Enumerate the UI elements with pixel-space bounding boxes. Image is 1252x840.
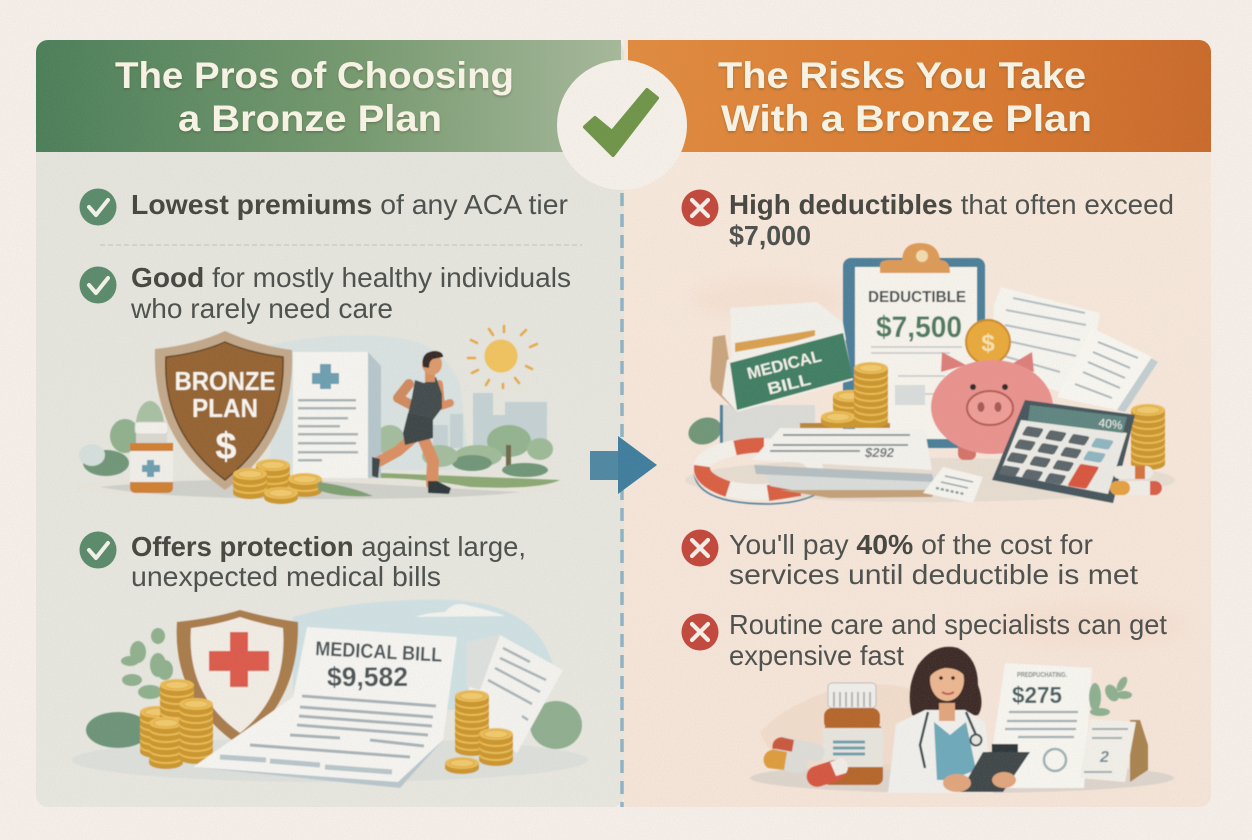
background hill and cloud [293,600,553,710]
doctor [888,647,993,793]
pills [1110,466,1163,495]
document [293,352,381,478]
calculator [992,400,1135,503]
text: You'll pay 40% of the cost for [729,529,1093,560]
text [131,531,526,592]
text: services until deductible is met [729,559,1138,590]
sun [468,326,537,388]
trees and bushes [79,401,553,477]
text [729,189,1174,251]
panel: risks [624,40,1211,807]
coins left [140,679,213,769]
pills [764,735,848,790]
text [130,262,571,324]
back paper [466,635,563,753]
header band: risks [628,40,1211,152]
shield: bronze plan: BRONZE [174,366,276,396]
calculator: 40% [1098,416,1124,432]
ground [72,738,588,782]
bullet: protection [80,531,526,592]
card and plant: 2 [1099,749,1109,766]
medical bill [193,627,457,788]
text: who rarely need care [130,293,393,324]
medicine bottle [823,683,883,785]
header band: pros [36,40,621,152]
clipboard: DEDUCTIBLE [868,289,966,306]
text: Offers protection against large, [131,531,526,562]
medical bill: $9,582 [327,662,408,692]
heading: risks: The Risks You Take [718,55,1086,96]
text: unexpected medical bills [131,561,441,592]
leaf [685,413,725,449]
heading: pros [115,55,514,139]
icon: check [80,532,116,568]
text: Good for mostly healthy individuals [131,262,571,293]
shield: red cross [177,610,298,746]
ground [75,473,565,499]
bill: 275: PREDPUCHATING. [1017,670,1067,679]
panel: pros [36,40,624,807]
icon: x [682,190,718,226]
bullet: lowest premiums [80,188,568,226]
piggy bank: $ [981,330,995,357]
illustration: bronze plan shield and runner [75,326,565,504]
bullet: high deductibles [682,189,1174,251]
clipboard: $7,500 [876,311,962,344]
text: expensive fast [729,640,904,671]
coins [233,459,322,504]
coins right [445,690,513,774]
back papers [992,287,1158,412]
pale background shape [760,684,930,770]
medicine bottle [130,422,173,493]
illustration: deductible pile [685,243,1175,504]
heading: risks [718,55,1092,139]
background hill [270,335,470,470]
bill: 275 [990,663,1092,788]
heading: pros: The Pros of Choosing [115,55,514,96]
illustration: shield and medical bill [72,600,588,788]
shield: bronze plan: PLAN [192,393,258,423]
bill: 275: $275 [1012,682,1062,708]
coins center [800,362,890,428]
buildings [433,393,547,449]
medical bill folder: MEDICAL [745,347,823,383]
icon: check [80,188,116,226]
tablet and hands [943,744,1030,792]
card and plant [1080,675,1148,782]
icon: check [80,266,116,304]
icon: x [682,530,718,566]
small note [923,467,983,503]
shield: bronze plan: $ [215,426,237,468]
runner [372,351,451,494]
ground shadow [750,763,1174,793]
medical bill folder: BILL [766,371,813,399]
bullet: routine care [682,609,1167,671]
text [729,529,1138,590]
heading: risks: With a Bronze Plan [721,98,1092,139]
stacked forms: $292 [864,445,895,460]
ground shadow [685,458,1175,502]
bullet: 40 percent [682,529,1138,590]
leaf [318,482,373,496]
illustration: doctor and bills [750,647,1174,793]
text: Lowest premiums of any ACA tier [131,189,568,220]
medical bill folder [710,302,853,443]
bullet: good for healthy [80,262,571,324]
lifebuoy [694,445,831,504]
icon: x [682,614,718,650]
center check badge [557,60,687,190]
heading: pros: a Bronze Plan [178,98,442,139]
plants [86,628,582,749]
arrow [590,436,657,494]
text [729,609,1167,671]
coins right [1131,404,1165,470]
text: Routine care and specialists can get [729,609,1167,640]
stacked forms [752,428,936,498]
clipboard [843,243,985,448]
medical bill: MEDICAL BILL [315,638,443,667]
piggy bank [931,320,1053,460]
text: High deductibles that often exceed [729,189,1174,220]
shield: bronze plan [155,331,292,490]
text: $7,000 [729,220,811,251]
